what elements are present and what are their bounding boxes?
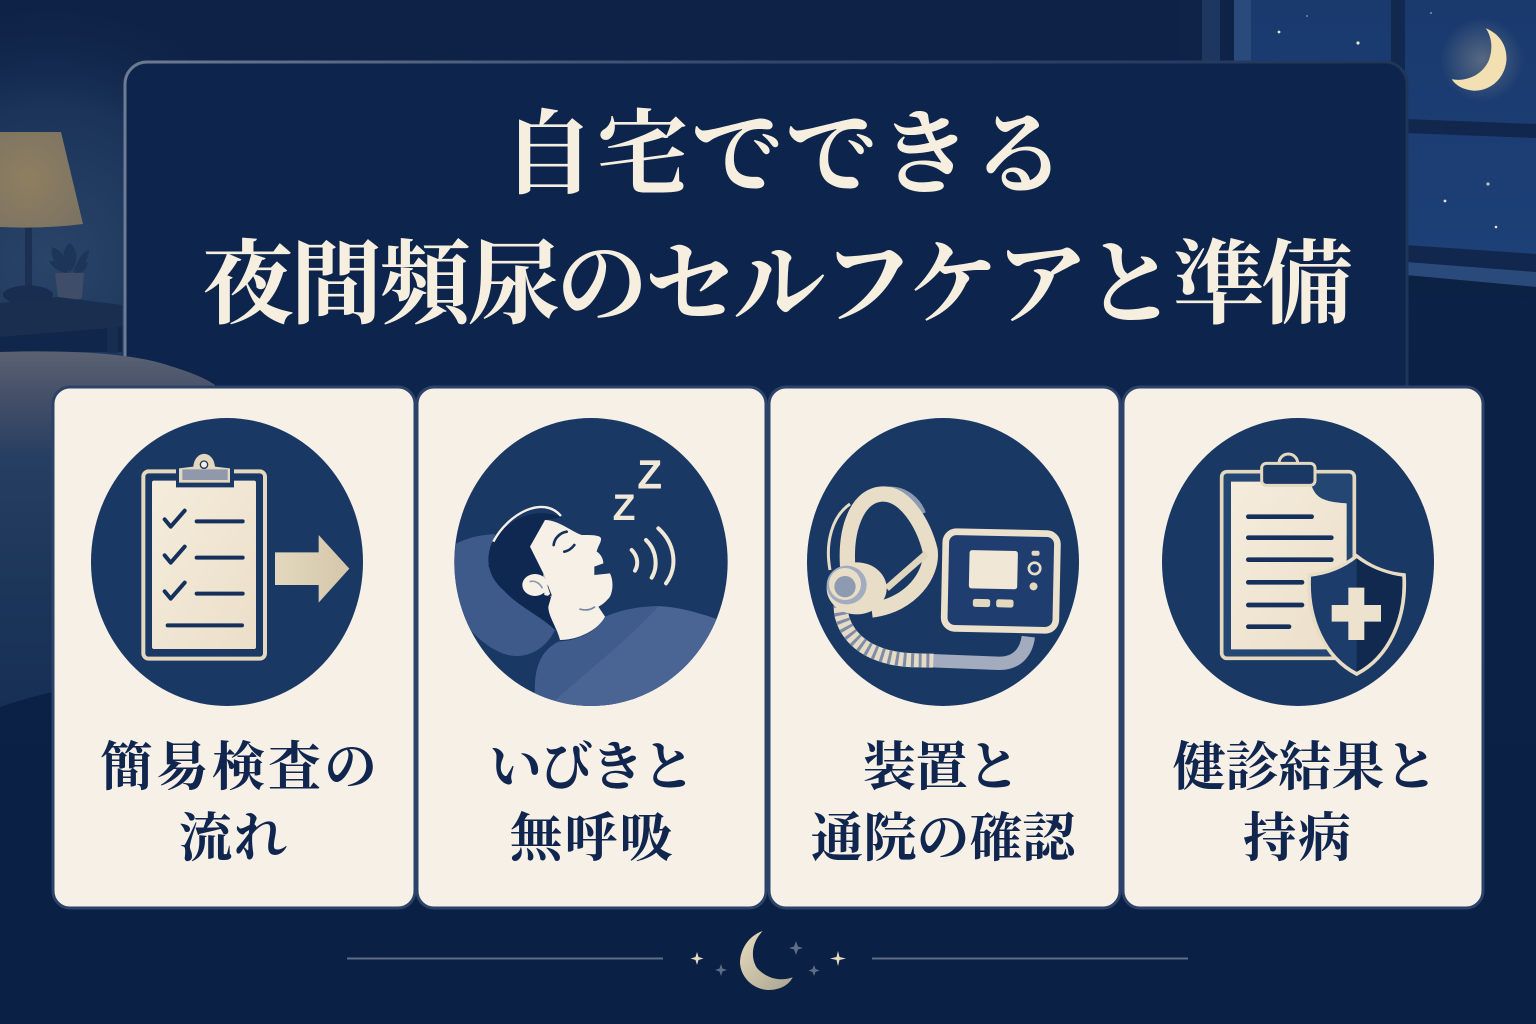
crescent — [740, 931, 793, 990]
card 3: device and clinic visits — [769, 387, 1120, 908]
card 4: checkup results and chronic illness — [1123, 387, 1483, 908]
label — [489, 739, 693, 868]
icon: CPAP mask and machine — [827, 489, 1058, 663]
icon: clipboard with checklist and arrow — [143, 452, 349, 659]
label — [810, 739, 1079, 868]
title — [202, 104, 1351, 336]
nightstand — [0, 297, 122, 353]
label: いびきと — [489, 739, 693, 797]
snore letters — [613, 451, 662, 528]
snore letters: Z — [613, 486, 635, 528]
card 1: simple test flow — [53, 387, 415, 908]
label: 通院の確認 — [810, 810, 1079, 868]
night window — [1180, 0, 1536, 300]
icon: snoring sleeper — [452, 418, 728, 710]
title panel — [125, 62, 1407, 422]
snore letters: Z — [637, 451, 662, 497]
label: 健診結果と — [1172, 739, 1438, 797]
label — [100, 738, 380, 868]
potted plant — [49, 243, 89, 300]
icon: clipboard with medical shield — [1222, 454, 1404, 674]
bedside lamp — [0, 132, 83, 304]
label: 持病 — [1243, 809, 1353, 868]
label: 簡易検査の — [100, 738, 380, 797]
label: 流れ — [179, 810, 289, 868]
title: 自宅でできる — [502, 104, 1068, 206]
label: 装置と — [863, 739, 1019, 797]
crescent moon — [1440, 18, 1524, 102]
bed — [0, 351, 215, 707]
footer ornament — [347, 931, 1188, 990]
label: 無呼吸 — [510, 810, 674, 868]
stars in window — [1278, 12, 1497, 228]
label — [1172, 739, 1438, 868]
title: 夜間頻尿のセルフケアと準備 — [202, 234, 1351, 336]
stars — [690, 941, 846, 976]
card 2: snoring and apnea — [417, 387, 766, 908]
